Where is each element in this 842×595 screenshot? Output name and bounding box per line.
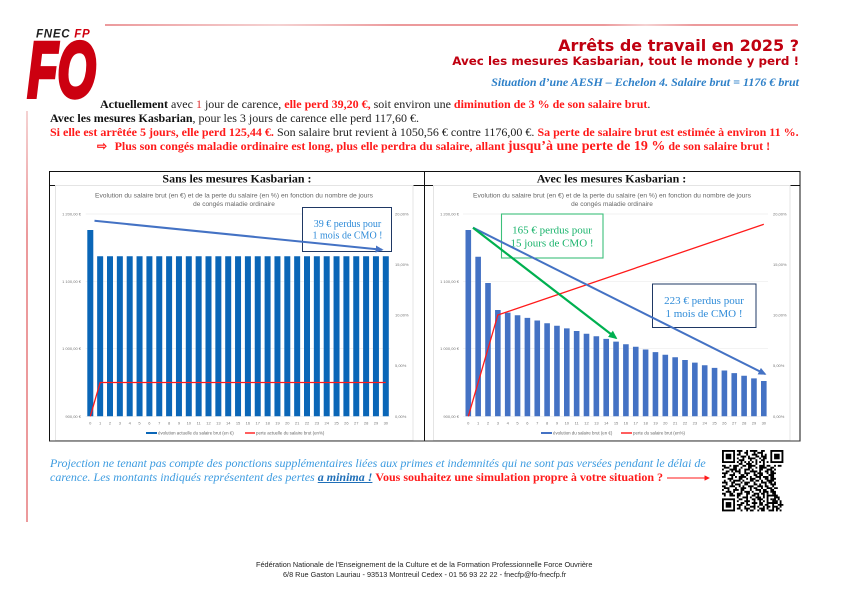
grid lines xyxy=(463,214,768,416)
chart title: Evolution du salaire brut (en €) et de la perte du salaire (en %) en fonction du nombre de jours xyxy=(473,192,752,200)
text block: projection note xyxy=(50,456,706,484)
right axis labels xyxy=(395,212,409,419)
footer xyxy=(256,560,592,579)
category labels: 22 xyxy=(683,420,688,426)
table heading: with: Avec les mesures Kasbarian : xyxy=(537,172,686,186)
category labels: 20 xyxy=(285,420,290,426)
callout: 39 euros: 39 € perdus pour xyxy=(314,219,382,230)
category labels: 0 xyxy=(467,420,470,426)
category labels: 25 xyxy=(334,420,340,426)
category labels: 16 xyxy=(246,420,251,426)
category labels: 23 xyxy=(315,420,320,426)
left axis labels: 1 100,00 € xyxy=(440,279,460,284)
right axis labels: 0,00% xyxy=(773,414,785,419)
category labels: 9 xyxy=(178,420,181,426)
category labels: 15 xyxy=(614,420,619,426)
logo: FNEC FP / FO: FNEC FP xyxy=(36,28,90,40)
right axis labels: 15,00% xyxy=(395,262,409,267)
left axis labels: 1 100,00 € xyxy=(62,279,82,284)
category labels: 26 xyxy=(722,420,727,426)
category labels: 13 xyxy=(594,420,599,426)
category labels: 9 xyxy=(556,420,559,426)
table heading: without: Sans les mesures Kasbarian : xyxy=(162,172,312,186)
category labels: 6 xyxy=(526,420,529,426)
category labels: 3 xyxy=(119,420,122,426)
legend xyxy=(541,430,686,436)
left axis labels: 1 200,00 € xyxy=(440,212,460,216)
category labels: 30 xyxy=(762,420,767,426)
callout: 165 euros xyxy=(502,214,603,258)
category labels: 12 xyxy=(206,420,211,426)
chart title: de congés maladie ordinaire xyxy=(571,201,653,208)
legend: évolution du salaire brut (en €) xyxy=(553,430,613,436)
category labels: 1 xyxy=(99,420,102,426)
category labels: 28 xyxy=(364,420,369,426)
left axis labels: 900,00 € xyxy=(65,414,82,419)
category labels: 12 xyxy=(584,420,589,426)
right axis labels: 15,00% xyxy=(773,262,787,267)
category labels: 8 xyxy=(168,420,171,426)
category labels: 4 xyxy=(129,420,132,426)
category labels: 14 xyxy=(604,420,609,426)
category labels: 18 xyxy=(643,420,649,426)
line: current situation: Actuellement avec 1 jour de carence, elle perd 39,20 €, soit environ une diminution de 3 % de son salaire brut. xyxy=(100,97,650,111)
right axis labels: 20,00% xyxy=(395,212,409,216)
category labels: 8 xyxy=(546,420,549,426)
chart title: Evolution du salaire brut (en €) et de la perte du salaire (en %) en fonction du nombre de jours xyxy=(95,192,374,200)
panel: chart with the measures xyxy=(434,186,790,440)
subtitle: Avec les mesures Kasbarian, tout le monde y perd ! xyxy=(452,54,799,68)
note line 2: carence. Les montants indiqués représentent des pertes a minima ! Vous souhaitez une simulation propre à votre situation ? xyxy=(50,470,663,484)
category labels: 10 xyxy=(565,420,570,426)
legend xyxy=(146,430,325,436)
category labels: 27 xyxy=(732,420,737,426)
chart title: de congés maladie ordinaire xyxy=(193,201,275,208)
category labels: 14 xyxy=(226,420,231,426)
footer line 2: 6/8 Rue Gaston Lauriau - 93513 Montreuil Cedex - 01 56 93 22 22 - fnecfp@fo-fnecfp.fr xyxy=(283,570,566,579)
callout: 223 euros: 223 € perdus pour xyxy=(664,295,744,307)
chart title xyxy=(473,192,752,208)
category labels: 22 xyxy=(305,420,310,426)
category labels: 30 xyxy=(384,420,389,426)
right axis labels: 20,00% xyxy=(773,212,787,216)
category labels: 4 xyxy=(507,420,510,426)
loss line xyxy=(468,224,764,416)
table frame xyxy=(50,172,800,441)
text block: key figures xyxy=(50,97,799,154)
left axis labels: 1 000,00 € xyxy=(440,346,460,351)
right axis labels: 10,00% xyxy=(395,312,409,318)
panel: chart without the measures xyxy=(56,186,413,440)
category labels: 2 xyxy=(487,420,490,426)
callout: 165 euros: 165 € perdus pour xyxy=(512,224,592,236)
category labels: 19 xyxy=(653,420,658,426)
category labels: 19 xyxy=(275,420,280,426)
logo: FNEC FP / FO: FO xyxy=(28,26,96,113)
category labels: 29 xyxy=(374,420,379,426)
left axis labels: 1 000,00 € xyxy=(62,346,82,351)
category labels: 17 xyxy=(634,420,639,426)
category labels: 11 xyxy=(197,420,201,426)
category labels: 29 xyxy=(752,420,757,426)
category labels: 15 xyxy=(236,420,241,426)
category labels: 5 xyxy=(516,420,519,426)
category labels: 13 xyxy=(216,420,221,426)
category labels: 6 xyxy=(148,420,151,426)
category labels: 20 xyxy=(663,420,668,426)
category labels: 25 xyxy=(712,420,718,426)
arrow to QR code xyxy=(667,477,709,479)
note line 1: Projection ne tenant pas compte des ponctions supplémentaires liées aux primes et indemnités qui ne sont pas versées pendant le délai de xyxy=(50,456,706,470)
category labels xyxy=(89,420,389,426)
salary bars xyxy=(468,230,764,416)
arrow: blue trend xyxy=(473,228,765,374)
situation line: Situation d’une AESH – Echelon 4. Salaire brut = 1176 € brut xyxy=(491,75,799,89)
category labels: 5 xyxy=(138,420,141,426)
legend: perte du salaire brut (en%) xyxy=(633,430,686,436)
category labels: 24 xyxy=(702,420,708,426)
line: with the measures: Avec les mesures Kasbarian, pour les 3 jours de carence elle perd 117,60 €. xyxy=(50,110,419,124)
chart background xyxy=(434,186,790,440)
arrow: blue trend xyxy=(94,221,382,250)
category labels: 21 xyxy=(673,420,678,426)
category labels: 18 xyxy=(265,420,271,426)
category labels: 28 xyxy=(742,420,747,426)
category labels: 17 xyxy=(256,420,261,426)
right axis labels xyxy=(773,212,787,419)
category labels: 11 xyxy=(575,420,579,426)
right axis labels: 0,00% xyxy=(395,414,407,419)
legend: perte actuelle du salaire brut (en%) xyxy=(256,430,325,436)
category labels: 10 xyxy=(187,420,192,426)
loss line xyxy=(90,382,386,416)
right axis labels: 5,00% xyxy=(773,363,785,368)
category labels: 0 xyxy=(89,420,92,426)
right axis labels: 10,00% xyxy=(773,312,787,318)
footer line 1: Fédération Nationale de l'Enseignement de la Culture et de la Formation Professionnelle Force Ouvrière xyxy=(256,560,592,569)
left red rule xyxy=(26,111,28,522)
left axis labels: 900,00 € xyxy=(443,414,460,419)
chart background xyxy=(56,186,413,440)
left axis labels: 1 200,00 € xyxy=(62,212,82,216)
callout: 39 euros: 1 mois de CMO ! xyxy=(312,231,382,242)
arrow: green trend xyxy=(473,228,616,338)
table bottom edge xyxy=(50,440,800,442)
category labels: 23 xyxy=(693,420,698,426)
category labels: 24 xyxy=(324,420,330,426)
category labels: 1 xyxy=(477,420,480,426)
category labels: 7 xyxy=(536,420,539,426)
category labels: 26 xyxy=(344,420,349,426)
line: long sick leave: ⇨ Plus son congés maladie ordinaire est long, plus elle perdra du salaire, allant jusqu’à une perte de 19 % de son salaire brut ! xyxy=(97,139,770,154)
callout: 223 euros: 1 mois de CMO ! xyxy=(666,308,742,320)
QR code xyxy=(722,451,783,510)
chart title xyxy=(95,192,374,208)
category labels: 27 xyxy=(354,420,359,426)
category labels: 7 xyxy=(158,420,161,426)
left axis labels xyxy=(440,212,460,419)
grid lines xyxy=(86,214,390,416)
category labels: 21 xyxy=(295,420,300,426)
category labels xyxy=(467,420,767,426)
salary bars xyxy=(90,230,386,416)
top red rule xyxy=(105,24,798,26)
legend: évolution actuelle du salaire brut (en €) xyxy=(158,430,234,436)
line: five-day stop: Si elle est arrêtée 5 jours, elle perd 125,44 €. Son salaire brut revient à 1050,56 € contre 1176,00 €. Sa perte de salaire brut est estimée à environ 11 %. xyxy=(50,124,799,138)
callout: 39 euros xyxy=(302,208,392,252)
category labels: 2 xyxy=(109,420,112,426)
right axis labels: 5,00% xyxy=(395,363,407,368)
category labels: 3 xyxy=(497,420,500,426)
title: Arrêts de travail en 2025 ? xyxy=(558,36,799,54)
left axis labels xyxy=(62,212,82,419)
callout: 223 euros xyxy=(652,284,756,328)
category labels: 16 xyxy=(624,420,629,426)
callout: 165 euros: 15 jours de CMO ! xyxy=(510,238,594,250)
